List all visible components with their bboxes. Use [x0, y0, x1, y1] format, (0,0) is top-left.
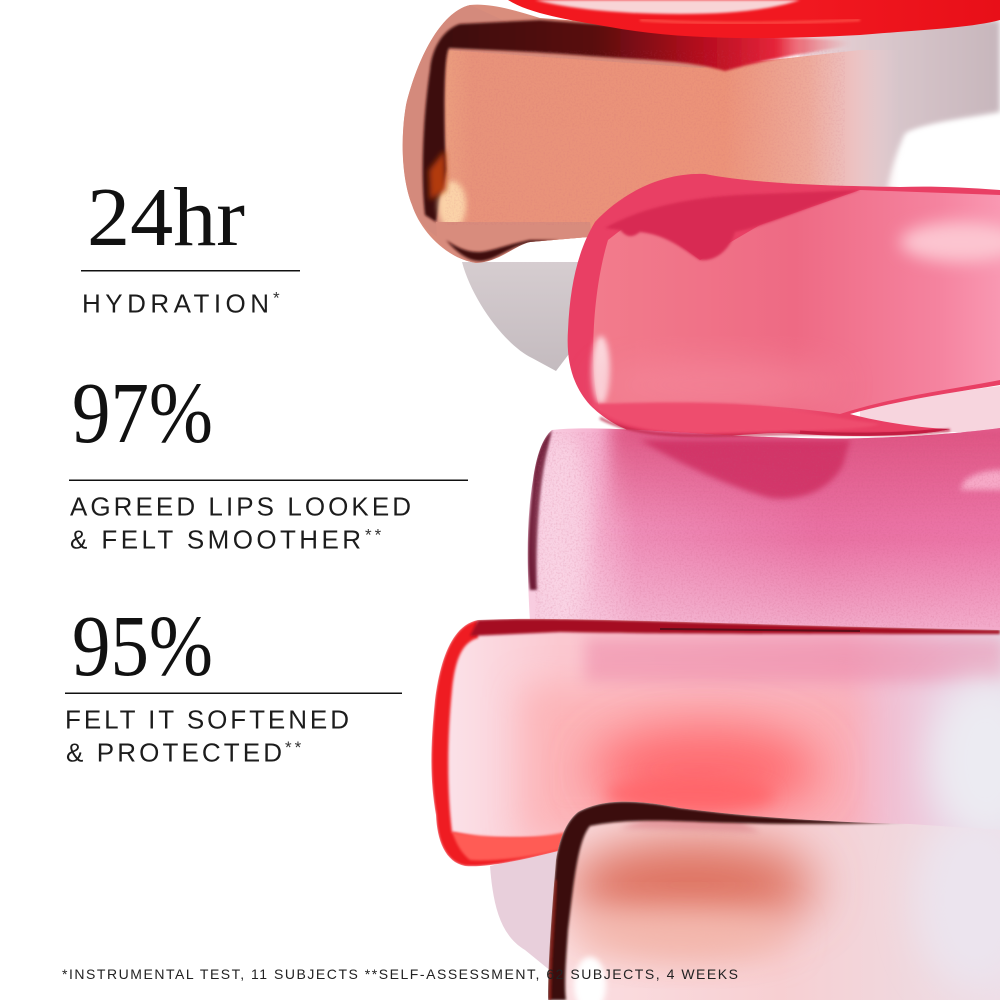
- label: agreed lips looked: AGREED LIPS LOOKED: [70, 492, 411, 522]
- coral left rim: [402, 5, 470, 208]
- stat: 24hr hydration: [81, 171, 300, 318]
- swatch: red gloss: [425, 610, 1000, 875]
- number: 95%: 95%: [72, 597, 213, 694]
- stat: 97%: [69, 364, 468, 554]
- footnote marker: **: [365, 526, 384, 544]
- magenta fold shadow: [640, 440, 850, 499]
- red dark top edge: [470, 619, 1000, 636]
- shadow under red swatch: [490, 850, 562, 972]
- red swatch glow: [520, 685, 860, 840]
- coral grain: [445, 50, 845, 225]
- stat: 95%: [65, 597, 402, 768]
- red left rim: [431, 620, 558, 866]
- pink bottom lip: [590, 402, 880, 434]
- footnote marker: **: [285, 738, 304, 757]
- footnote: *INSTRUMENTAL TEST, 11 SUBJECTS **SELF-ASSESSMENT, 62 SUBJECTS, 4 WEEKS: [62, 966, 738, 982]
- peach dark edge: [548, 802, 905, 1000]
- footnote marker: *: [273, 288, 283, 308]
- swatch: top red: [508, 0, 1000, 38]
- pink dark fold shadow: [605, 190, 860, 260]
- label: hydration: HYDRATION: [82, 288, 269, 318]
- label: felt it softened: FELT IT SOFTENED: [65, 704, 349, 734]
- label: felt smoother: & FELT SMOOTHER: [70, 524, 361, 554]
- number: 97%: 97%: [72, 364, 213, 461]
- magenta left edge: [528, 430, 552, 590]
- swatch: magenta pink: [520, 420, 1000, 635]
- magenta grain: [535, 432, 1000, 627]
- swatch: rose pink: [560, 165, 1000, 450]
- coral bottom lip: [436, 222, 592, 263]
- shadow behind upper swatches: [462, 20, 1000, 432]
- pink swatch lower edge overlay: [600, 418, 950, 436]
- label: protected: & PROTECTED: [66, 738, 282, 768]
- lipstick swatches photo: [395, 0, 1000, 1000]
- swatch: coral: [402, 4, 876, 263]
- peach glow: [565, 839, 815, 931]
- coral orange corner glow: [438, 181, 466, 229]
- white glare patch: [898, 116, 1000, 192]
- number: 24hr: 24hr: [87, 171, 245, 264]
- coral dark top edge: [423, 20, 870, 222]
- pink highlights: [900, 222, 1000, 262]
- swatch: bottom peach: [540, 795, 1000, 1000]
